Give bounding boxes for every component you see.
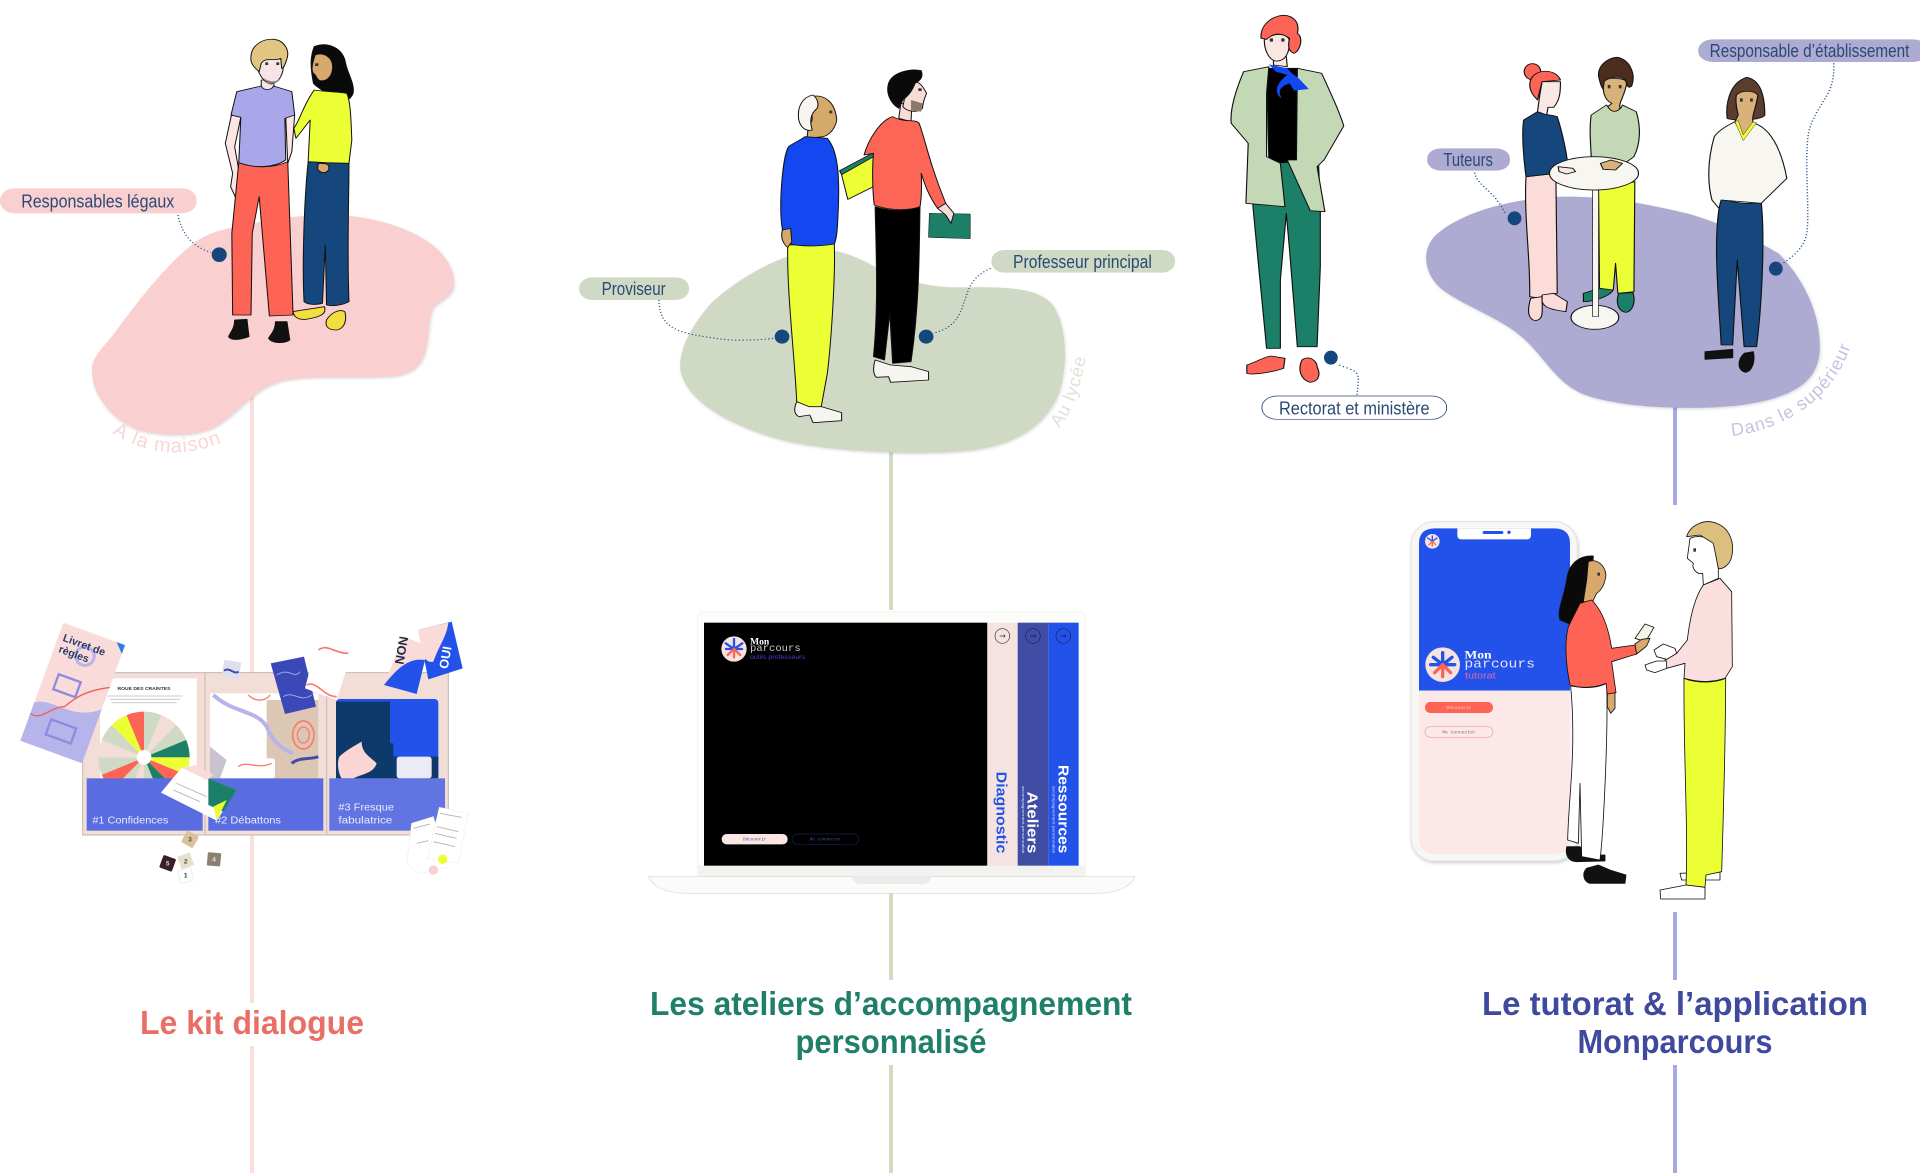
boutons phone — [1425, 702, 1493, 737]
callout: tuteurs — [1427, 148, 1521, 225]
pockets: #3 Fresque — [338, 803, 394, 814]
callout: rectorat et ministère — [1262, 351, 1447, 419]
callout: tuteurs: Tuteurs — [1443, 149, 1493, 170]
cartes: territoire — [221, 643, 352, 714]
callout: professeur principal — [919, 250, 1175, 344]
figure: woman in yellow sweater — [293, 45, 353, 330]
sheet: map — [210, 693, 318, 778]
dés: 3 — [188, 837, 192, 844]
blob: au lycée — [680, 250, 1065, 453]
logo mon parcours tutorat: tutorat — [1465, 671, 1496, 681]
figure: proviseur — [781, 95, 842, 423]
panel: kit dialogue — [20, 622, 468, 883]
callout: responsables légaux: Responsables légaux — [21, 191, 175, 212]
laptop body — [648, 612, 1135, 893]
livret de règles — [20, 623, 125, 763]
folder — [83, 673, 448, 835]
callout: responsables légaux — [0, 188, 227, 262]
pockets: #1 Confidences — [92, 815, 168, 826]
logo mon parcours tutorat — [1425, 647, 1535, 682]
icon: round table — [1549, 157, 1639, 329]
sheet: roue des craintes — [98, 678, 197, 803]
figure: professeur principal — [864, 70, 970, 382]
sheet: roue des craintes: ROUE DES CRAINTES — [118, 686, 171, 692]
onglet: ateliers: Ateliers — [1024, 792, 1040, 853]
figure: tutor with red bun — [1523, 64, 1567, 321]
pockets: fabulatrice — [338, 815, 393, 826]
onglet: ressources — [1048, 623, 1079, 866]
boutons phone: Me connecter — [1442, 730, 1476, 736]
panel: laptop — [648, 612, 1135, 893]
curved label: au lycée: Au lycée — [1052, 358, 1086, 428]
figure: man with yellow trousers — [1645, 522, 1733, 899]
title: le tutorat et l'application monparcours: Le tutorat & l’application — [1482, 985, 1868, 1022]
curved label: dans le supérieur: Dans le supérieur — [1732, 344, 1850, 436]
boutons: Me connecter — [810, 838, 841, 843]
logo mon parcours: outils professeurs — [750, 654, 806, 661]
livret de règles: Livret de — [61, 632, 107, 659]
callout: proviseur: Proviseur — [602, 279, 666, 299]
logo mon parcours tutorat: Mon — [1464, 648, 1492, 662]
pockets: #2 Débattons — [215, 815, 281, 826]
boutons phone: Découvrir — [1446, 705, 1472, 711]
panel: dans le supérieur — [1231, 15, 1920, 419]
boutons — [722, 834, 859, 844]
boutons: Découvrir — [743, 838, 767, 843]
dés: 4 — [212, 857, 216, 864]
onglet: ressources: Ressources — [1054, 765, 1070, 853]
dés: 1 — [184, 873, 188, 880]
callout: proviseur — [579, 277, 789, 344]
fiches — [407, 807, 468, 875]
onglet: diagnostic: Diagnostic — [993, 772, 1009, 853]
title: les ateliers d'accompagnement personnalisé: personnalisé — [796, 1023, 986, 1060]
blob: dans le supérieur — [1426, 197, 1820, 408]
figure: tutor with brown hair — [1583, 57, 1639, 312]
curved label: à la maison: À la maison — [112, 424, 220, 452]
cartes: non et oui: OUI — [437, 645, 455, 670]
livret de règles: règles — [57, 643, 91, 666]
callout: professeur principal: Professeur principal — [1013, 252, 1152, 272]
title: le tutorat et l'application monparcours: Monparcours — [1578, 1023, 1772, 1060]
title: les ateliers d'accompagnement personnalisé — [650, 985, 1132, 1060]
connector lines — [252, 390, 1675, 1173]
icon: yellow book — [840, 153, 873, 199]
panel: phone and figures — [1411, 522, 1733, 899]
logo mon parcours: Mon — [750, 636, 769, 646]
figure: woman with phone — [1559, 556, 1654, 883]
écran — [704, 623, 987, 866]
title: le kit dialogue: Le kit dialogue — [140, 1004, 364, 1041]
carte: confidences — [161, 765, 237, 821]
small logo — [1425, 534, 1440, 549]
panel: à la maison — [0, 39, 454, 435]
onglet: ateliers: accompagnement personnalisé — [1021, 786, 1025, 854]
onglet: diagnostic — [987, 623, 1018, 866]
logo mon parcours tutorat: parcours — [1464, 658, 1535, 673]
figure: responsable d'établissement — [1705, 77, 1787, 372]
figure: man in lavender shirt — [225, 39, 295, 343]
blob: à la maison — [92, 215, 454, 435]
title: le tutorat et l'application monparcours — [1482, 985, 1868, 1060]
panel: au lycée — [579, 70, 1175, 453]
title: les ateliers d'accompagnement personnalisé: Les ateliers d’accompagnement — [650, 985, 1132, 1022]
callout: responsable d'établissement — [1698, 39, 1920, 276]
dés: 5 — [166, 861, 170, 868]
cartes: non et oui: NON — [392, 635, 411, 666]
logo mon parcours — [721, 636, 806, 662]
dés — [159, 830, 221, 883]
callout: rectorat et ministère: Rectorat et ministère — [1279, 398, 1430, 418]
onglet: ateliers — [1018, 623, 1048, 866]
phone — [1411, 522, 1577, 861]
pockets — [87, 778, 445, 831]
sheet: fresque — [336, 699, 438, 778]
figure: rectorat woman — [1231, 15, 1344, 382]
logo mon parcours: parcours — [750, 643, 801, 654]
cartes: non et oui — [384, 622, 463, 694]
onglet: ressources: accompagnement personnalisé — [1052, 786, 1056, 854]
dés: 2 — [184, 858, 188, 865]
